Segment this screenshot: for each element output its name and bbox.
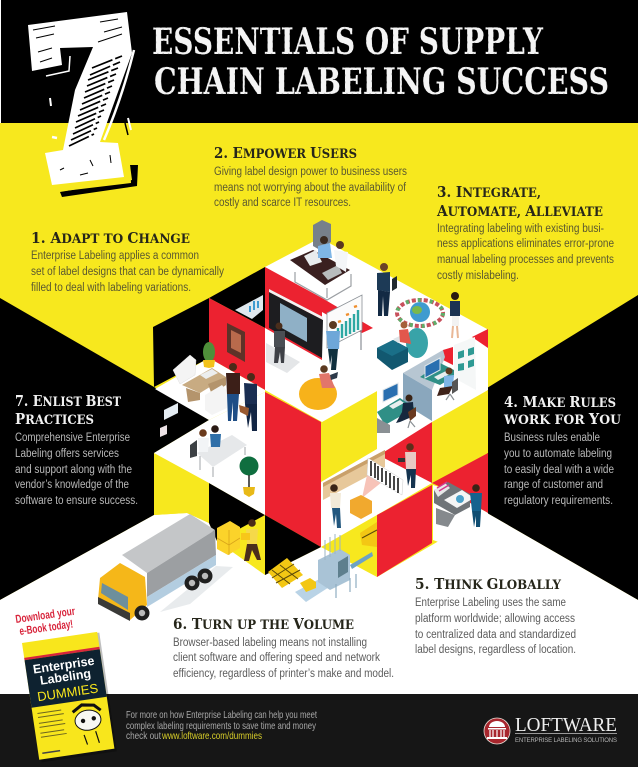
header band: [1, 0, 638, 123]
barcode floor: [321, 422, 432, 547]
scene: whiteboard chart: [327, 295, 362, 350]
left yellow wall: [154, 453, 209, 523]
callout: download e-book: e-Book today!: [19, 619, 74, 638]
scene: small wall signs: [160, 403, 178, 437]
text block: 7. Enlist Best Practices: vendor’s knowledge of the: [15, 479, 129, 491]
text block: 6. Turn up the Volume: Browser-based labeling means not installing: [173, 637, 367, 649]
logo: Loftware: ENTERPRISE LABELING SOLUTIONS: [515, 738, 617, 744]
printer floor: [433, 485, 488, 548]
scene: standing woman: [450, 292, 460, 338]
right yellow wall: [432, 390, 488, 483]
footer text: For more on how Enterprise Labeling can help you meet: [126, 709, 317, 721]
text block: 6. Turn up the Volume: 6. TURN UP THE VOLUME: [173, 615, 354, 633]
text block: 6. Turn up the Volume: [173, 615, 394, 680]
logo: Loftware: [484, 715, 617, 744]
book cover: DUMMIES: [36, 680, 99, 704]
icon: big number 7: [28, 12, 138, 197]
upper left black wall: [153, 267, 265, 387]
scene: standing man with devices: [377, 263, 397, 316]
office floor: [155, 358, 265, 420]
scene: potted tree: [240, 456, 258, 497]
black side panel: left: [0, 298, 209, 600]
text block: 4. Make Rules Work for You: [503, 393, 622, 507]
text block: 5. Think Globally: to centralized data and standardized: [415, 629, 576, 641]
centre black wall: [265, 515, 321, 575]
text block: 6. Turn up the Volume: client software and offering speed and network: [173, 652, 380, 664]
book cover: Enterprise: [32, 654, 95, 677]
scene: warehouse worker: [330, 484, 372, 528]
scene: office desk: [173, 342, 228, 415]
footer text: [126, 709, 317, 742]
upper red wall right: [384, 422, 432, 483]
right red wall: [432, 453, 488, 513]
text block: 2. Empower Users: 2. EMPOWER USERS: [214, 144, 357, 162]
text block: 5. Think Globally: 5. THINK GLOBALLY: [415, 575, 562, 593]
text block: 3. Integrate, Automate, Alleviate: ness applications eliminates error-prone: [437, 238, 614, 250]
text block: 1. Adapt to Change: [31, 229, 224, 294]
black side panel: right: [487, 295, 638, 600]
scene: conveyor and yellow bales: [268, 522, 377, 602]
left white floor: [154, 392, 265, 515]
red small wall: [443, 347, 453, 365]
footer text: check out: [126, 730, 161, 742]
text block: 5. Think Globally: label designs, regardless of location.: [415, 644, 576, 656]
footer band: [0, 694, 638, 767]
scene: man with scanner: [398, 443, 416, 488]
text block: 3. Integrate, Automate, Alleviate: costly mislabeling.: [437, 270, 519, 282]
text block: 7. Enlist Best Practices: [15, 392, 138, 507]
title: [152, 21, 609, 103]
scene: delivery truck: [98, 514, 233, 621]
top red wall: [265, 267, 373, 360]
text block: 1. Adapt to Change: filled to deal with labeling variations.: [31, 282, 191, 294]
text block: 7. Enlist Best Practices: software to ensure success.: [15, 495, 138, 507]
callout: download e-book: [15, 606, 76, 638]
centre yellow wall: [321, 392, 377, 482]
text block: 2. Empower Users: Giving label design power to business users: [214, 166, 407, 178]
scene: barcode: [367, 458, 403, 495]
text block: 2. Empower Users: means not worrying about the availability of: [214, 182, 407, 194]
white lower floor: [0, 513, 638, 694]
text block: 4. Make Rules Work for You: regulatory requirements.: [504, 495, 613, 507]
text block: 4. Make Rules Work for You: Business rules enable: [504, 432, 600, 444]
scene: two men shaking hands: [226, 363, 257, 431]
text block: 7. Enlist Best Practices: 7. ENLIST BEST: [15, 392, 121, 410]
text block: 6. Turn up the Volume: efficiency, regardless of printer’s make and model.: [173, 668, 394, 680]
footer text: www.loftware.com/dummies: [161, 730, 262, 742]
icon: rotunda seal: [484, 718, 510, 744]
book cover: [22, 632, 117, 763]
book cover: Labeling: [39, 666, 92, 688]
lower red wall right: [377, 485, 432, 577]
text block: 5. Think Globally: platform worldwide; allowing access: [415, 613, 575, 625]
upper left red wall: [209, 298, 265, 390]
text block: 7. Enlist Best Practices: and support along with the: [15, 464, 132, 476]
text block: 3. Integrate, Automate, Alleviate: AUTOMATE, ALLEVIATE: [436, 202, 603, 220]
text block: 1. Adapt to Change: 1. ADAPT TO CHANGE: [31, 229, 190, 247]
top floor: [265, 238, 487, 422]
text block: 1. Adapt to Change: Enterprise Labeling applies a common: [31, 250, 199, 262]
text block: 3. Integrate, Automate, Alleviate: manual labeling processes and prevents: [437, 254, 614, 266]
logo: Loftware: LOFTWARE: [515, 715, 617, 736]
callout: download e-book: Download your: [15, 606, 76, 626]
text block: 7. Enlist Best Practices: Labeling offers services: [15, 448, 119, 460]
text block: 2. Empower Users: costly and scarce IT resources.: [214, 197, 351, 209]
scene: shelving: [323, 450, 385, 500]
scene: globe with flags: [397, 300, 443, 326]
scene: presentation screen: [266, 289, 323, 373]
scene: yellow beanbag: [299, 365, 338, 410]
text block: 3. Integrate, Automate, Alleviate: [436, 183, 614, 282]
red triangle corner: [472, 329, 488, 348]
scene: printer operator: [434, 482, 482, 527]
text block: 3. Integrate, Automate, Alleviate: Integrating labeling with existing busi-: [437, 223, 604, 235]
text block: 4. Make Rules Work for You: you to automate labeling: [504, 448, 612, 460]
scene: teal box and beanbag: [377, 322, 428, 370]
text block: 3. Integrate, Automate, Alleviate: 3. INTEGRATE,: [437, 183, 541, 201]
centre red wall: [265, 392, 321, 547]
text block: 5. Think Globally: [415, 575, 576, 656]
text block: 7. Enlist Best Practices: PRACTICES: [15, 410, 94, 428]
scene: man in blue shirt: [326, 321, 340, 370]
isometric building: [153, 238, 488, 577]
text block: 4. Make Rules Work for You: range of customer and: [504, 479, 603, 491]
scene: wall chart and painting: [227, 295, 263, 362]
text block: 4. Make Rules Work for You: 4. MAKE RULES: [504, 393, 616, 411]
text block: 5. Think Globally: Enterprise Labeling uses the same: [415, 597, 566, 609]
scene: top desk: [290, 220, 351, 300]
text block: 4. Make Rules Work for You: to easily deal with a wide: [504, 464, 614, 476]
text block: 7. Enlist Best Practices: Comprehensive Enterprise: [15, 432, 130, 444]
scene: cubicle office: [377, 337, 476, 433]
text block: 4. Make Rules Work for You: WORK FOR YOU: [503, 410, 622, 428]
scene: meeting table: [190, 425, 247, 477]
scene: man carrying boxes: [217, 519, 261, 561]
footer text: complex labeling requirements to save time and money: [126, 720, 317, 732]
right room: [377, 337, 488, 451]
left black wall: [209, 483, 265, 541]
text block: 2. Empower Users: [214, 144, 407, 209]
text block: 1. Adapt to Change: set of label designs that can be dynamically: [31, 266, 224, 278]
